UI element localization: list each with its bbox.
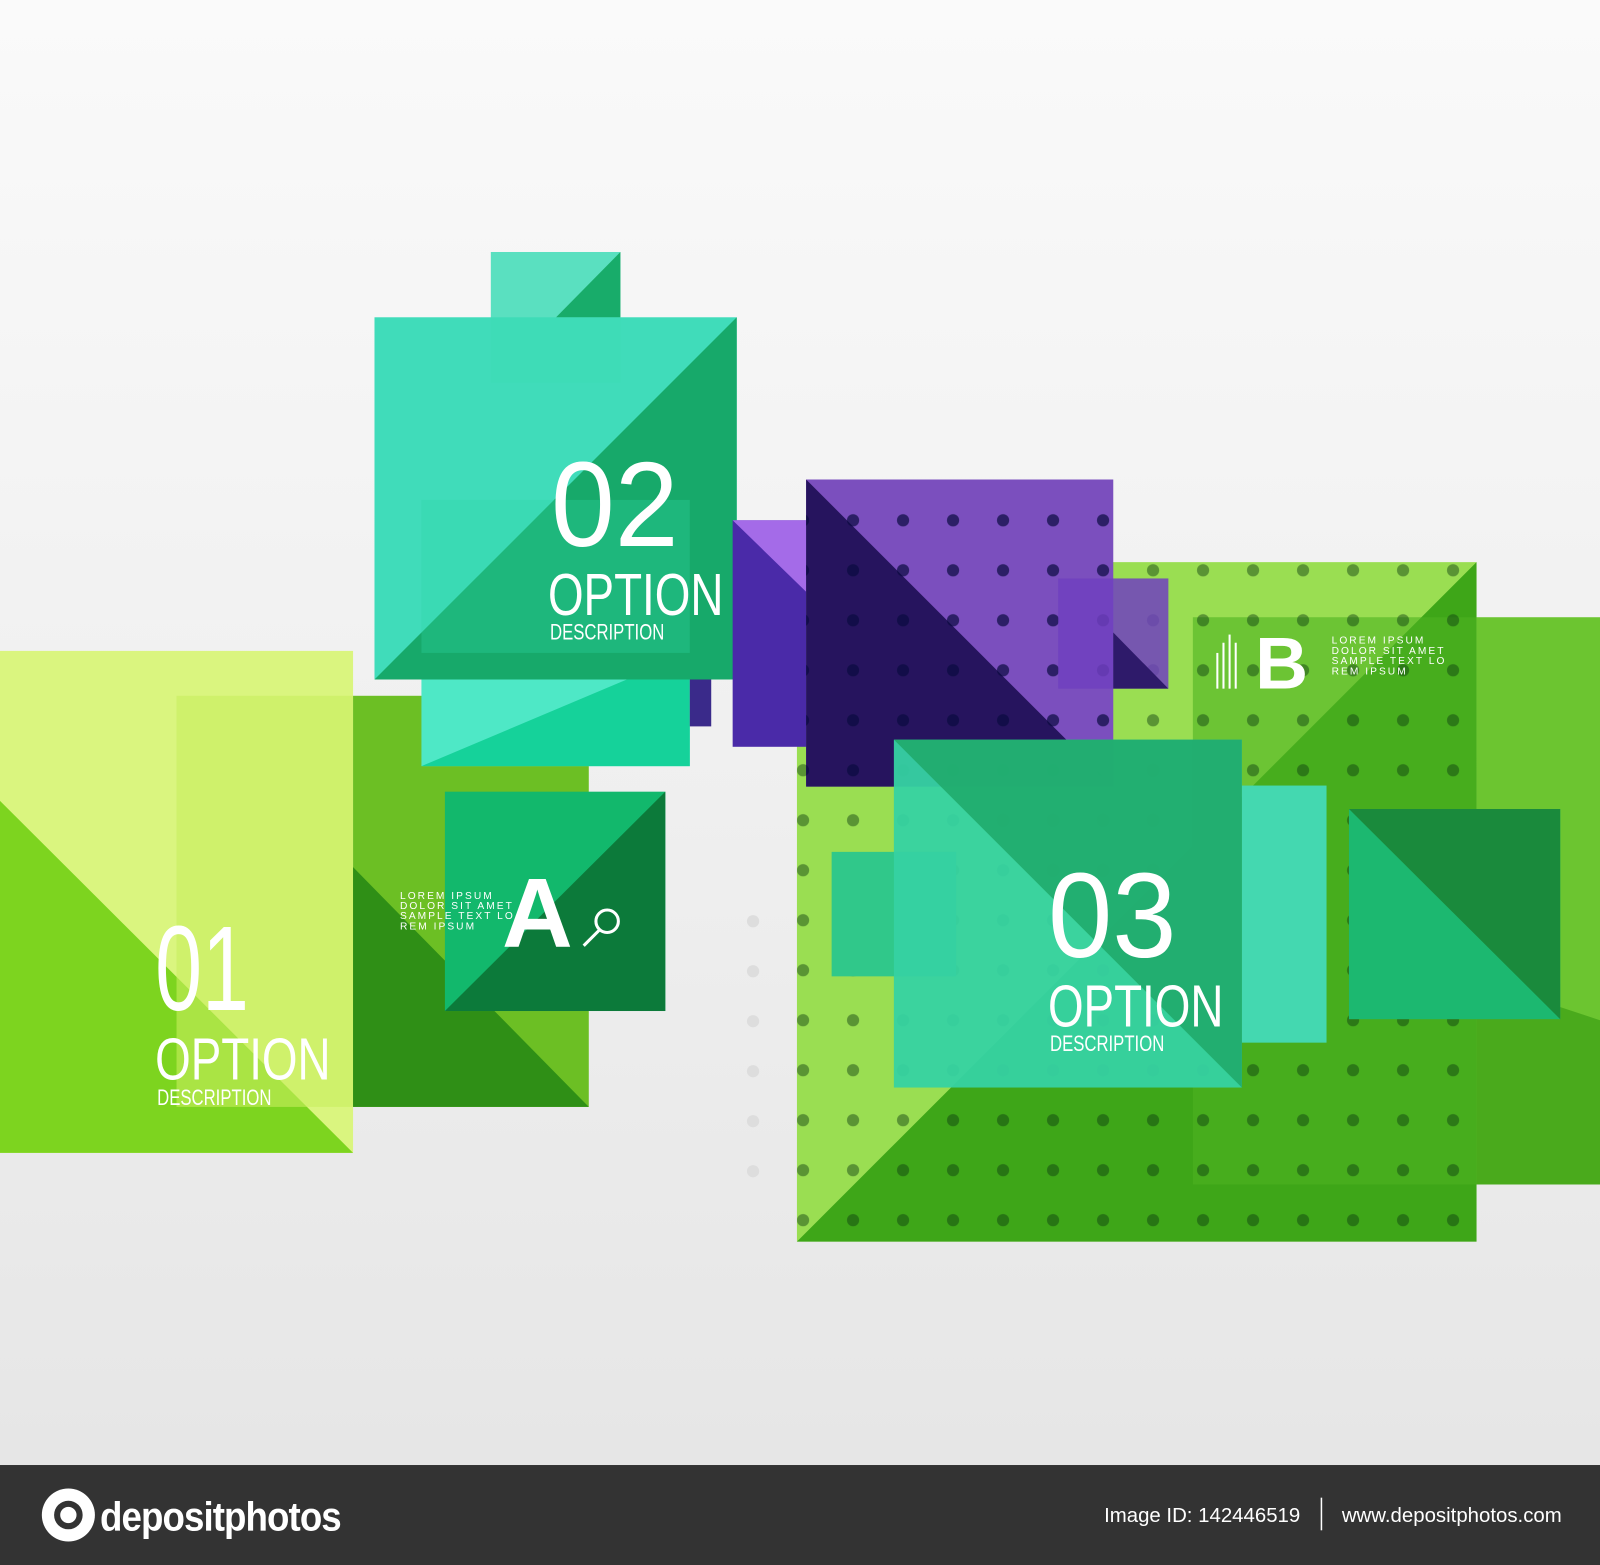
text block: lorem A: REM IPSUM: [400, 921, 476, 932]
heading: 01 option: [155, 901, 331, 1110]
text block: lorem B: REM IPSUM: [1332, 666, 1408, 677]
footer bar: depositphotos: [100, 1493, 341, 1539]
panel: purple block: [733, 479, 1168, 787]
text block: lorem A: DOLOR SIT AMET: [400, 901, 514, 912]
heading: 02 option: OPTION: [548, 561, 723, 628]
footer bar: www.depositphotos.com: [1341, 1505, 1562, 1527]
icon: letter B: B: [1255, 622, 1308, 705]
heading: 01 option: 01: [155, 901, 249, 1036]
text block: lorem B: LOREM IPSUM: [1332, 636, 1425, 647]
text block: lorem B: DOLOR SIT AMET: [1332, 646, 1446, 657]
heading: 01 option: DESCRIPTION: [157, 1085, 271, 1110]
icon: letter A with magnifier: [502, 858, 618, 968]
heading: 02 option: 02: [551, 437, 679, 572]
panel: option 03: [832, 622, 1560, 1088]
text block: lorem A: LOREM IPSUM: [400, 891, 494, 902]
panel: option 01: [0, 651, 589, 1153]
text block: lorem A: [400, 891, 515, 932]
panel: green block base: [797, 562, 1600, 1242]
panel: option A: [400, 792, 665, 1011]
footer bar: Image ID: 142446519: [1104, 1505, 1300, 1527]
text block: lorem A: SAMPLE TEXT LO: [400, 911, 515, 922]
heading: 03 option: DESCRIPTION: [1050, 1031, 1164, 1056]
heading: 03 option: [1048, 848, 1223, 1056]
heading: 02 option: [548, 437, 723, 645]
heading: 03 option: OPTION: [1048, 972, 1223, 1039]
heading: 02 option: DESCRIPTION: [550, 620, 664, 645]
text block: lorem B: [1332, 636, 1446, 677]
icon: letter A with magnifier: A: [502, 858, 573, 968]
heading: 01 option: OPTION: [155, 1025, 331, 1092]
text block: lorem B: SAMPLE TEXT LO: [1332, 656, 1446, 667]
heading: 03 option: 03: [1048, 848, 1177, 983]
icon: letter B: [1217, 622, 1308, 705]
footer bar: [0, 1465, 1600, 1565]
panel: option 02: [374, 252, 737, 766]
